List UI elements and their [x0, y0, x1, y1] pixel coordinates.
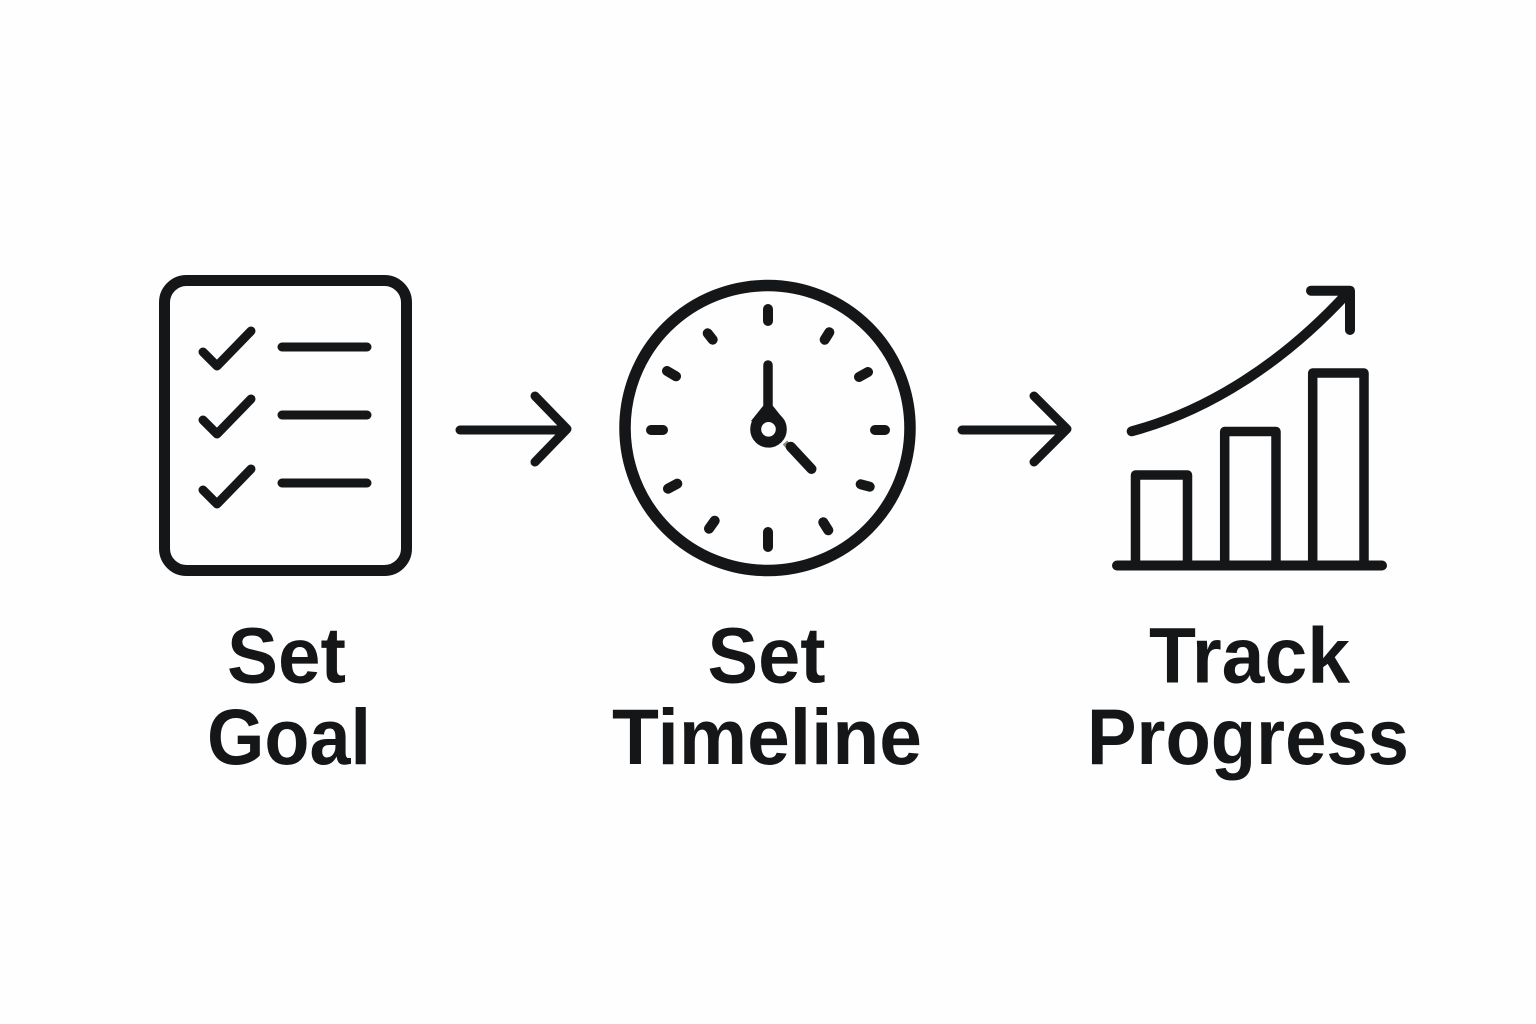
label: set timeline: Set — [708, 610, 826, 700]
label: track progress: Progress — [1087, 692, 1409, 781]
icon: growth chart — [1117, 291, 1382, 566]
label: track progress — [1087, 610, 1409, 781]
label: set timeline: Timeline — [612, 692, 922, 781]
label: set timeline — [612, 610, 922, 781]
label: track progress: Track — [1149, 610, 1351, 700]
arrow: goal to timeline — [460, 396, 567, 462]
arrow: timeline to progress — [962, 396, 1067, 462]
label: set goal: Goal — [207, 692, 371, 781]
label: set goal — [207, 610, 371, 781]
icon: checklist — [164, 280, 406, 570]
label: set goal: Set — [227, 610, 346, 700]
icon: clock — [625, 286, 910, 570]
